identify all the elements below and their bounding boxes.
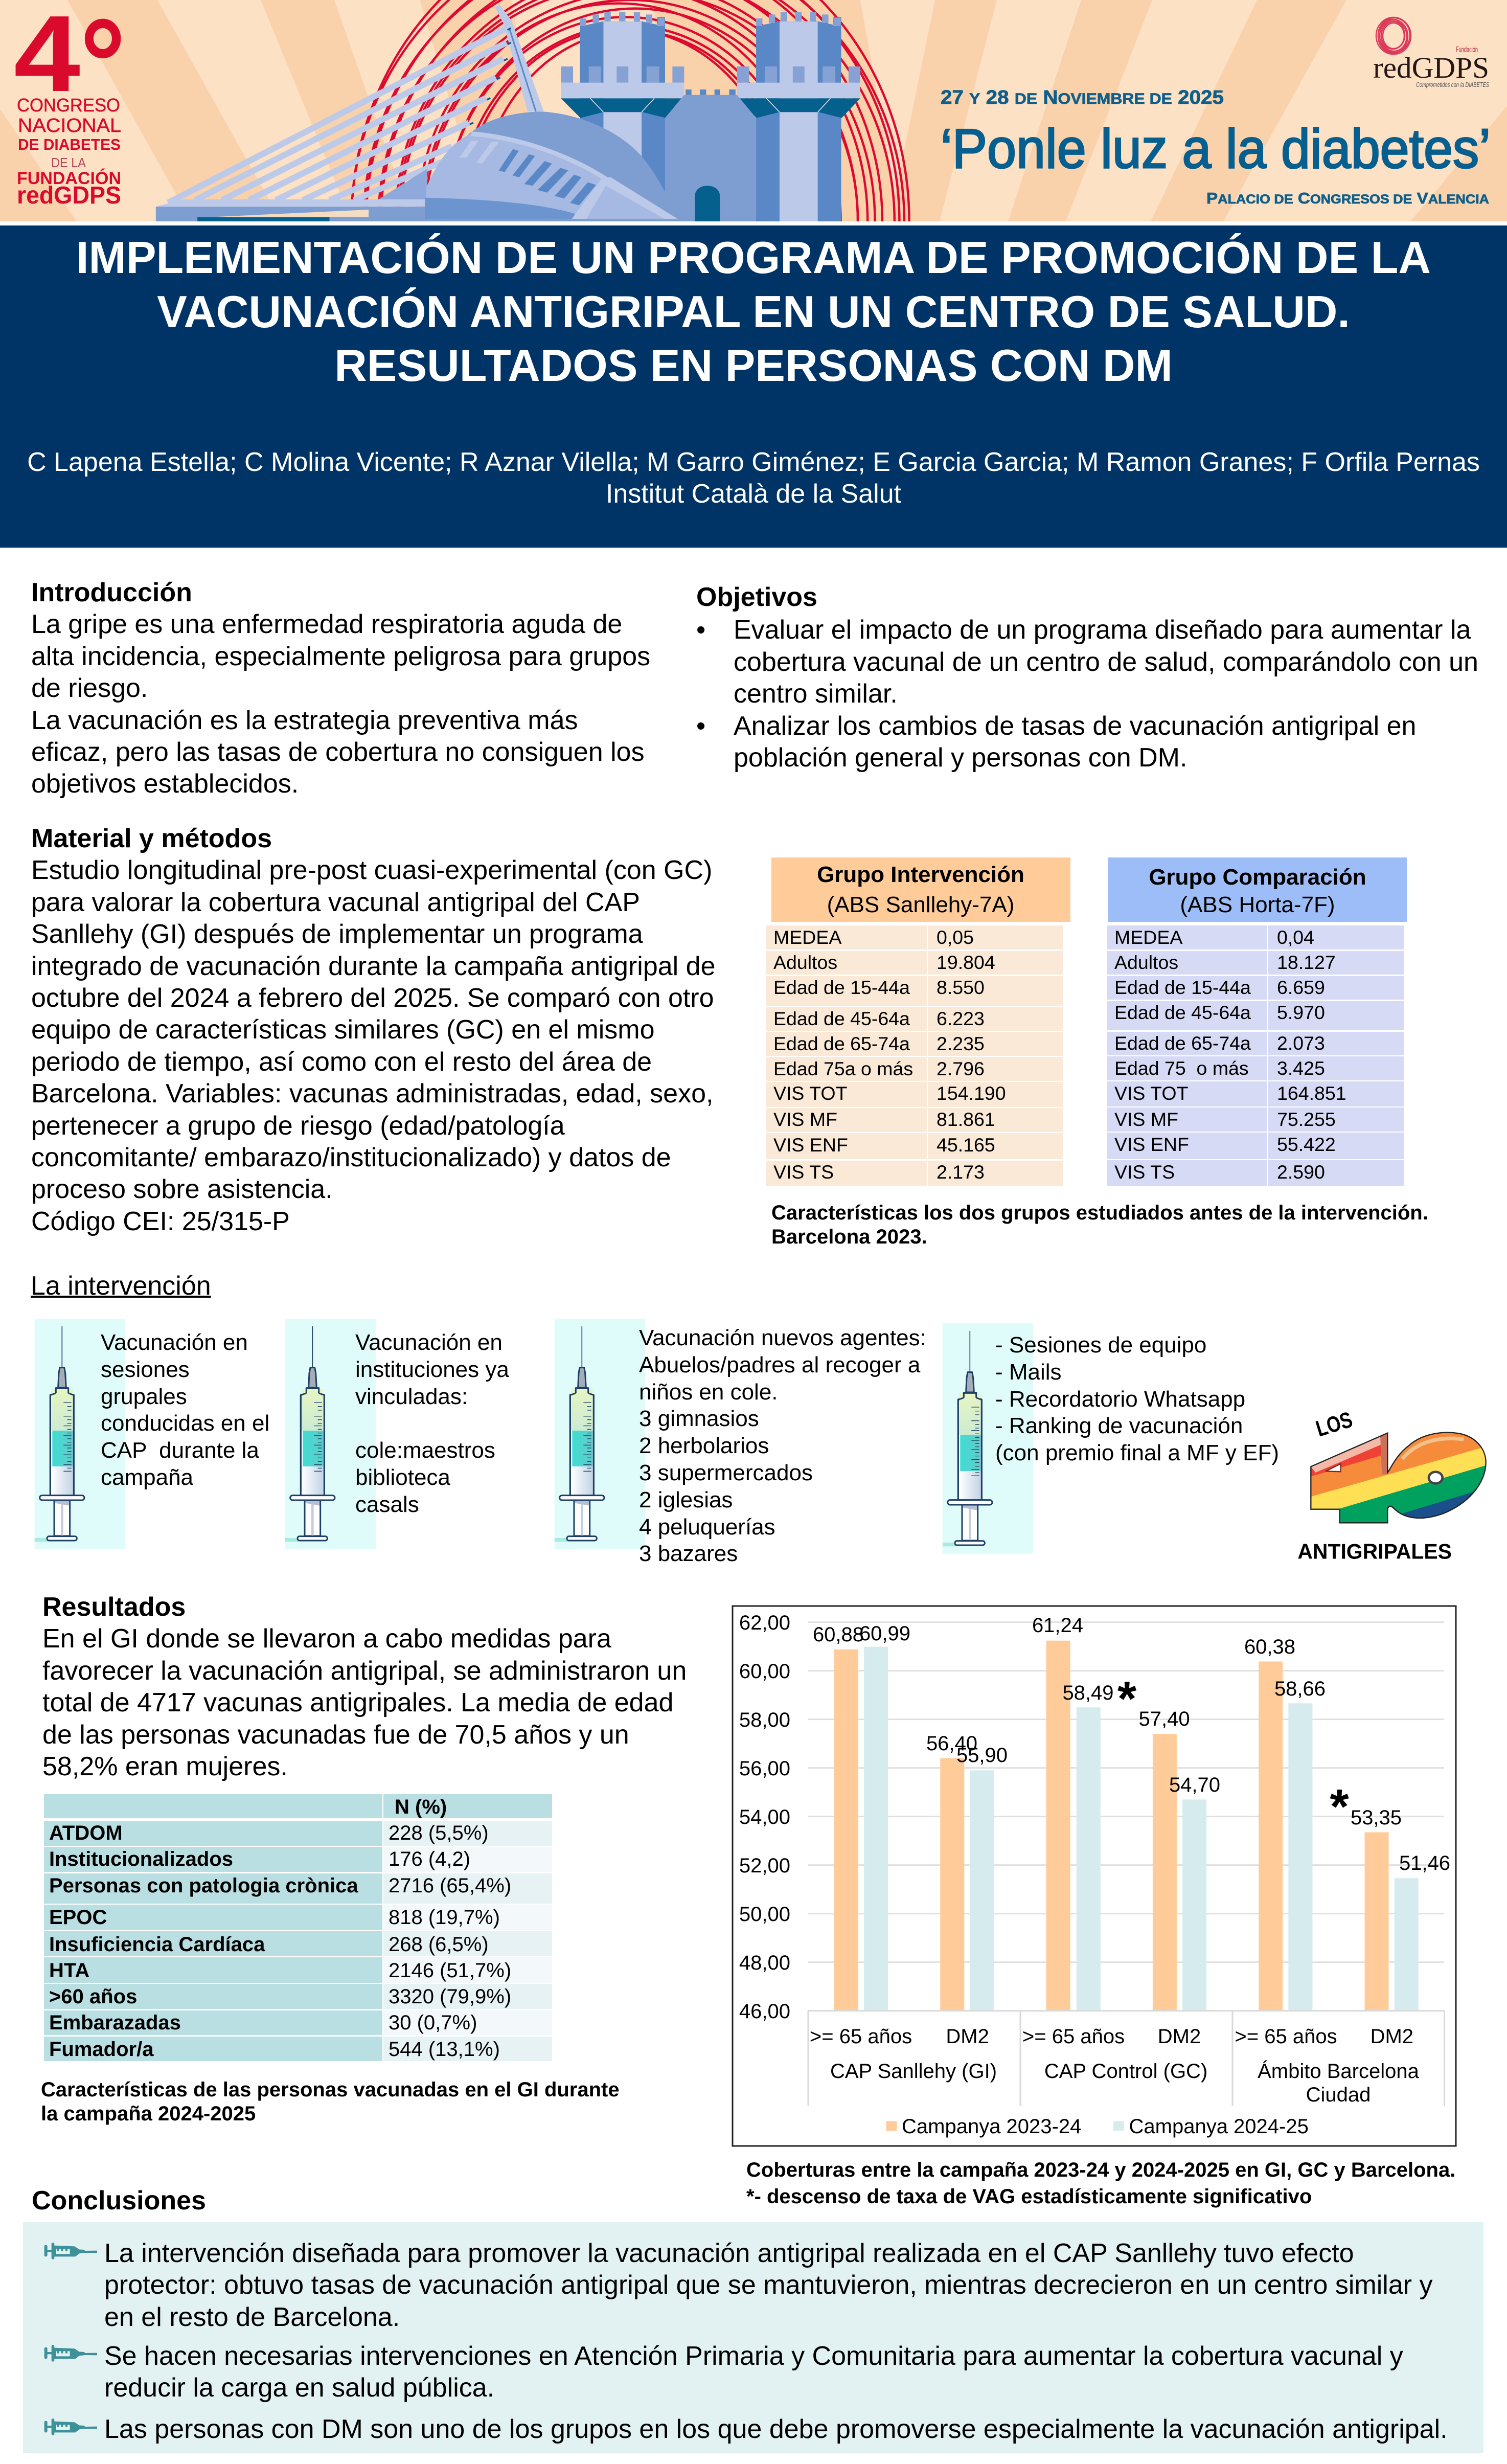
intervention text 3: 4 peluquerías: [639, 1514, 775, 1540]
introducción: alta incidencia, especialmente peligrosa para grupos: [31, 642, 650, 671]
table: grupo intervención: (ABS Sanllehy-7A): [827, 892, 1014, 917]
right tower: [737, 12, 860, 221]
table: grupo intervención: 19.804: [937, 952, 995, 973]
intervention text 2: [355, 1330, 509, 1517]
bars campanya 2024-25: [864, 1647, 1419, 2011]
resultados: 58,2% eran mujeres.: [42, 1752, 288, 1781]
y axis labels: 60,00: [739, 1660, 790, 1683]
table: grupo intervención: 0,05: [937, 926, 974, 948]
conclusiones heading: Conclusiones: [32, 2186, 206, 2216]
table: grupo comparación: Edad de 15-44a: [1114, 977, 1251, 998]
table: grupo comparación: Grupo Comparación: [1149, 865, 1366, 890]
table: vaccinated population: EPOC: [49, 1906, 107, 1929]
intervention text 4: - Mails: [995, 1360, 1062, 1385]
material y métodos: Sanllehy (GI) después de implementar un programa: [31, 919, 643, 949]
caption: vaccinated population: Características de las personas vacunadas en el GI durante: [41, 2078, 620, 2101]
data labels: 58,49: [1062, 1682, 1114, 1704]
pylon: [495, 5, 544, 111]
icon: bullet syringe 2: [31, 2337, 107, 2372]
data labels: 60,88: [813, 1623, 864, 1646]
conclusión 1: [104, 2239, 1433, 2332]
y axis labels: 56,00: [739, 1757, 790, 1780]
congress logo text: FUNDACIÓN: [17, 169, 121, 188]
objetivos: población general y personas con DM.: [734, 743, 1187, 773]
table: vaccinated population: Institucionalizados: [49, 1848, 233, 1870]
material y métodos: Barcelona. Variables: vacunas administradas, edad, sexo,: [31, 1079, 713, 1109]
table: grupo intervención: Edad de 65-74a: [773, 1033, 910, 1054]
bridge deck: [156, 199, 427, 207]
intervention text 4: - Ranking de vacunación: [995, 1413, 1243, 1438]
intervention text 1: conducidas en el: [101, 1411, 269, 1436]
table: grupo comparación: 2.073: [1277, 1032, 1325, 1054]
bridge cables: [168, 28, 511, 203]
table: grupo intervención: MEDEA: [773, 926, 841, 948]
number 40: [1309, 1430, 1489, 1525]
material y métodos: proceso sobre asistencia.: [31, 1174, 333, 1204]
material y métodos: periodo de tiempo, así como con el resto del área de: [31, 1047, 652, 1077]
table: grupo intervención: Adultos: [773, 952, 837, 973]
y axis labels: [739, 1612, 790, 2023]
table: grupo comparación: 164.851: [1277, 1082, 1346, 1104]
table: grupo comparación: (ABS Horta-7F): [1180, 892, 1335, 917]
table: vaccinated population: 2146 (51,7%): [389, 1959, 511, 1982]
title: IMPLEMENTACIÓN DE UN PROGRAMA DE PROMOCIÓN DE LA: [76, 232, 1431, 283]
caption: chart: [746, 2159, 1455, 2208]
intervention text 3: 2 iglesias: [639, 1487, 733, 1512]
table: grupo intervención: Edad de 15-44a: [773, 977, 910, 998]
intervention text 3: 2 herbolarios: [639, 1433, 769, 1458]
LOS: LOS: [1313, 1407, 1355, 1442]
objetivos: Evaluar el impacto de un programa diseñado para aumentar la: [734, 615, 1471, 645]
category labels: Ciudad: [1306, 2084, 1371, 2106]
conclusión 2: [104, 2340, 1403, 2404]
caption: chart: Coberturas entre la campaña 2023-24 y 2024-2025 en GI, GC y Barcelona.: [746, 2159, 1455, 2181]
intervention text 2: casals: [355, 1492, 419, 1517]
syringe artwork: [35, 1319, 1033, 1553]
caption: grupos: Características los dos grupos estudiados antes de la intervención.: [771, 1202, 1428, 1224]
table: grupo comparación: 75.255: [1277, 1109, 1336, 1130]
introducción: de riesgo.: [31, 673, 148, 703]
data labels: 60,38: [1244, 1636, 1295, 1658]
title: VACUNACIÓN ANTIGRIPAL EN UN CENTRO DE SALUD.: [157, 286, 1350, 336]
axis lines: [808, 2011, 1445, 2106]
title: RESULTADOS EN PERSONAS CON DM: [334, 340, 1173, 391]
significance asterisks: *: [1330, 1779, 1349, 1834]
congress logo text: DE LA: [51, 155, 86, 170]
material y métodos: concomitante/ embarazo/institucionalizado) y datos de: [31, 1143, 671, 1172]
table: grupo intervención: VIS TOT: [773, 1082, 848, 1104]
table: grupo comparación: 6.659: [1277, 977, 1325, 998]
material y métodos: integrado de vacunación durante la campaña antigripal de: [31, 952, 716, 981]
header banner: [0, 0, 1507, 221]
caption: chart: *- descenso de taxa de VAG estadísticamente significativo: [746, 2185, 1312, 2208]
table: grupo intervención: 2.173: [937, 1161, 985, 1183]
legend: [886, 2115, 1309, 2138]
table: grupo comparación: 3.425: [1277, 1057, 1325, 1079]
intervention text 4: [995, 1332, 1279, 1465]
introducción: La vacunación es la estrategia preventiva más: [31, 706, 578, 735]
table: grupo comparación: 0,04: [1277, 926, 1314, 948]
data labels: 57,40: [1139, 1708, 1190, 1730]
table: vaccinated population: 544 (13,1%): [389, 2038, 500, 2061]
material y métodos: [31, 824, 716, 1236]
tablas de grupos: [766, 857, 1428, 1248]
table: grupo intervención: VIS MF: [773, 1109, 837, 1130]
introducción: objetivos establecidos.: [31, 769, 299, 799]
conclusión 1: La intervención diseñada para promover la vacunación antigripal realizada en el CAP Sanllehy tuvo efecto: [104, 2239, 1354, 2268]
intervention text 3: Vacunación nuevos agentes:: [639, 1325, 926, 1350]
table: grupo intervención: 81.861: [937, 1109, 995, 1130]
objetivos: Objetivos: [696, 582, 817, 612]
material y métodos: para valorar la cobertura vacunal antigripal del CAP: [31, 888, 640, 917]
conclusión 2: Se hacen necesarias intervenciones en Atención Primaria y Comunitaria para aumentar la cobertura vacunal y: [104, 2341, 1403, 2371]
caption: grupos: [771, 1202, 1428, 1248]
intervention text 2: biblioteca: [355, 1465, 450, 1490]
table: vaccinated population: 228 (5,5%): [389, 1822, 489, 1844]
category labels: DM2: [1158, 2025, 1201, 2048]
intervention text 1: grupales: [101, 1384, 187, 1409]
intervention text 3: niños en cole.: [639, 1380, 778, 1405]
sunburst stripes: [0, 0, 1507, 221]
intervention text 2: vinculadas:: [355, 1384, 468, 1409]
data labels: 53,35: [1351, 1806, 1402, 1829]
significance asterisks: *: [1117, 1671, 1137, 1726]
table: grupo comparación: VIS TOT: [1114, 1082, 1189, 1104]
resultados: favorecer la vacunación antigripal, se administraron un: [42, 1656, 687, 1686]
objetivos: [696, 582, 1478, 773]
intervention text 1: [101, 1330, 269, 1490]
resultados: de las personas vacunadas fue de 70,5 años y un: [42, 1720, 629, 1750]
table: vaccinated population: 176 (4,2): [389, 1848, 470, 1870]
category labels: Ámbito Barcelona: [1258, 2060, 1420, 2083]
table: grupo comparación: VIS TS: [1114, 1161, 1175, 1183]
table: grupo comparación: [1107, 857, 1407, 1186]
authors and institution: C Lapena Estella; C Molina Vicente; R Aznar Vilella; M Garro Giménez; E Garcia Garcia; M Ramon Granes; F Orfila Pernas: [27, 447, 1480, 477]
intervention text 1: CAP durante la: [101, 1438, 259, 1463]
central gate: [665, 89, 756, 221]
table: vaccinated population: Insuficiencia Cardíaca: [49, 1933, 265, 1956]
intervention text 3: Abuelos/padres al recoger a: [639, 1352, 920, 1377]
event date: 27 Y 28 DE NOVIEMBRE DE 2025: [941, 87, 1224, 108]
la intervención heading: La intervención: [31, 1271, 211, 1301]
material y métodos: Material y métodos: [31, 824, 272, 853]
category labels: >= 65 años: [1235, 2025, 1337, 2048]
gridlines: [808, 1622, 1444, 1962]
venue: PALACIO DE CONGRESOS DE VALENCIA: [1206, 189, 1489, 207]
intervention text 1: sesiones: [101, 1357, 190, 1382]
congress logo text: [14, 0, 126, 209]
introducción: Introducción: [31, 578, 192, 607]
material y métodos: equipo de características similares (GC) en el mismo: [31, 1015, 655, 1045]
table: grupo intervención: Edad 75a o más: [773, 1058, 913, 1079]
ANTIGRIPALES: ANTIGRIPALES: [1297, 1540, 1452, 1563]
intervention text 4: - Recordatorio Whatsapp: [995, 1387, 1245, 1412]
resultados: En el GI donde se llevaron a cabo medidas para: [42, 1624, 611, 1654]
y axis labels: 52,00: [739, 1855, 790, 1877]
conclusión 2: reducir la carga en salud pública.: [104, 2373, 494, 2403]
table: grupo intervención: 45.165: [937, 1134, 995, 1156]
table: vaccinated population: Personas con patologia crònica: [49, 1874, 358, 1897]
category labels: CAP Sanllehy (GI): [830, 2060, 997, 2083]
icon: syringe 4: [943, 1323, 1033, 1554]
objetivos: centro similar.: [734, 679, 898, 709]
caption: vaccinated population: la campaña 2024-2025: [41, 2103, 256, 2125]
table: vaccinated population: 818 (19,7%): [389, 1906, 500, 1929]
congress logo text: NACIONAL: [18, 115, 121, 137]
y axis labels: 50,00: [739, 1903, 790, 1926]
data labels: 58,66: [1274, 1678, 1326, 1700]
legend: Campanya 2024-25: [1129, 2115, 1309, 2138]
icon: syringe 3: [555, 1319, 645, 1549]
table: vaccinated population: 3320 (79,9%): [389, 1985, 511, 2008]
intervention text 2: cole:maestros: [355, 1438, 495, 1463]
table: grupo intervención: VIS ENF: [773, 1134, 848, 1156]
y axis labels: 46,00: [739, 2000, 790, 2023]
table: grupo comparación: Edad de 45-64a: [1114, 1002, 1251, 1023]
data labels: 54,70: [1169, 1774, 1220, 1796]
table: grupo intervención: 6.223: [937, 1008, 985, 1029]
table: grupo comparación: 2.590: [1277, 1161, 1325, 1183]
redGDPS logo: Fundación: [1456, 46, 1478, 54]
conclusión 3: Las personas con DM son uno de los grupos en los que debe promoverse especialmente la vacunación antigripal.: [104, 2414, 1448, 2444]
logo: los 40 antigripales: [1297, 1407, 1487, 1563]
data labels: 51,46: [1399, 1852, 1450, 1874]
table: vaccinated population: HTA: [49, 1959, 89, 1982]
data labels: [813, 1614, 1450, 1874]
intervention text 3: [639, 1325, 926, 1566]
y axis labels: 58,00: [739, 1709, 790, 1731]
conclusión 1: protector: obtuvo tasas de vacunación antigripal que se mantuvieron, mientras decrecieron en un centro similar y: [104, 2270, 1433, 2300]
intervention text 4: - Sesiones de equipo: [995, 1332, 1206, 1358]
intervention text 2: instituciones ya: [355, 1357, 509, 1382]
congress logo text: redGDPS: [17, 182, 121, 209]
resultados: Resultados: [42, 1592, 186, 1622]
icon: bullet syringe 1: [44, 2243, 97, 2259]
material y métodos: Código CEI: 25/315-P: [31, 1207, 290, 1236]
material y métodos: pertenecer a grupo de riesgo (edad/patología: [31, 1111, 565, 1141]
intervention text 3: 3 gimnasios: [639, 1406, 759, 1431]
table: grupo comparación: 55.422: [1277, 1134, 1336, 1155]
congress logo text: DE DIABETES: [18, 135, 121, 153]
y axis labels: 62,00: [739, 1612, 790, 1634]
bar chart: coberturas: [732, 1606, 1457, 2208]
table: grupo comparación: MEDEA: [1114, 926, 1182, 948]
bars campanya 2023-24: [834, 1641, 1388, 2011]
introducción: [31, 578, 650, 799]
authors and institution: [27, 447, 1480, 509]
caption: grupos: Barcelona 2023.: [771, 1226, 927, 1248]
table: grupo intervención: [766, 857, 1070, 1186]
icon: syringe 1: [35, 1319, 125, 1549]
panel: conclusiones: [23, 2222, 1483, 2453]
material y métodos: octubre del 2024 a febrero del 2025. Se comparó con otro: [31, 983, 714, 1013]
congress logo text: CONGRESO: [17, 95, 120, 116]
table: vaccinated population: Embarazadas: [49, 2011, 181, 2034]
resultados: [42, 1592, 687, 1781]
table: grupo comparación: Edad de 65-74a: [1114, 1032, 1251, 1054]
table: grupo comparación: Adultos: [1114, 952, 1178, 973]
objetivos: Analizar los cambios de tasas de vacunación antigripal en: [734, 711, 1416, 741]
conclusión 1: en el resto de Barcelona.: [104, 2302, 400, 2332]
significance asterisks: [1117, 1671, 1349, 1834]
category labels: [810, 2025, 1420, 2106]
intervention text 3: 3 supermercados: [639, 1460, 813, 1485]
icon: syringe 2: [285, 1319, 376, 1549]
table: grupo intervención: 2.235: [937, 1033, 985, 1054]
data labels: 56,40: [926, 1732, 977, 1755]
table: vaccinated population: 2716 (65,4%): [389, 1874, 511, 1897]
table: vaccinated population: >60 años: [49, 1985, 137, 2008]
table and caption: características vacunados: [41, 1794, 620, 2125]
y axis labels: 48,00: [739, 1952, 790, 1974]
table: grupo comparación: Edad 75 o más: [1114, 1057, 1249, 1079]
left tower: [561, 12, 684, 221]
introducción: La gripe es una enfermedad respiratoria aguda de: [31, 609, 622, 639]
table: grupo intervención: 8.550: [937, 977, 985, 998]
table: grupo intervención: 154.190: [937, 1082, 1006, 1104]
category labels: CAP Control (GC): [1044, 2060, 1207, 2083]
title: [76, 232, 1431, 391]
table: grupo intervención: 2.796: [937, 1058, 985, 1079]
table: vaccinated population: N (%): [395, 1796, 447, 1818]
table: grupo comparación: 5.970: [1277, 1002, 1325, 1023]
authors and institution: Institut Català de la Salut: [606, 479, 901, 509]
table: grupo comparación: VIS MF: [1114, 1109, 1178, 1130]
introducción: eficaz, pero las tasas de cobertura no consiguen los: [31, 737, 645, 767]
table: grupo intervención: Edad de 45-64a: [773, 1008, 910, 1029]
objetivos: cobertura vacunal de un centro de salud, comparándolo con un: [734, 647, 1478, 677]
category labels: DM2: [1371, 2025, 1413, 2048]
table: grupo comparación: VIS ENF: [1114, 1134, 1189, 1155]
table: vaccinated population: ATDOM: [49, 1822, 123, 1844]
table: grupo comparación: 18.127: [1277, 952, 1336, 973]
legend: Campanya 2023-24: [902, 2115, 1081, 2138]
title band: [0, 225, 1507, 548]
intervention text 1: campaña: [101, 1465, 193, 1490]
data labels: 55,90: [956, 1744, 1008, 1767]
dome: [466, 111, 678, 221]
intervention text 1: Vacunación en: [101, 1330, 248, 1355]
resultados: total de 4717 vacunas antigripales. La media de edad: [42, 1688, 673, 1717]
table: grupo intervención: VIS TS: [773, 1161, 834, 1183]
table: vaccinated population: 30 (0,7%): [389, 2011, 477, 2034]
data labels: 61,24: [1032, 1614, 1083, 1637]
red arcs: [352, 0, 909, 525]
objetivos: •: [696, 711, 705, 741]
intervention text 2: Vacunación en: [355, 1330, 503, 1355]
category labels: >= 65 años: [1022, 2025, 1125, 2048]
table: vaccinated population: 268 (6,5%): [389, 1933, 489, 1956]
data labels: 60,99: [859, 1622, 910, 1645]
material y métodos: Estudio longitudinal pre-post cuasi-experimental (con GC): [31, 855, 712, 885]
table: vaccinated population: Fumador/a: [49, 2038, 154, 2061]
table: grupo intervención: Grupo Intervención: [817, 862, 1024, 887]
intervention text 3: 3 bazares: [639, 1541, 738, 1566]
intervention text 4: (con premio final a MF y EF): [995, 1440, 1279, 1465]
caption: vaccinated population: [41, 2078, 620, 2125]
icon: bullet syringe 3: [31, 2410, 107, 2446]
table: vaccinated population: [44, 1794, 552, 2061]
redGDPS logo: [1373, 17, 1489, 88]
y axis labels: 54,00: [739, 1806, 790, 1828]
category labels: DM2: [946, 2025, 989, 2048]
redGDPS logo: redGDPS: [1373, 51, 1489, 84]
objetivos: •: [696, 615, 705, 645]
Valencia skyline illustration: [156, 0, 909, 525]
category labels: >= 65 años: [810, 2025, 912, 2048]
